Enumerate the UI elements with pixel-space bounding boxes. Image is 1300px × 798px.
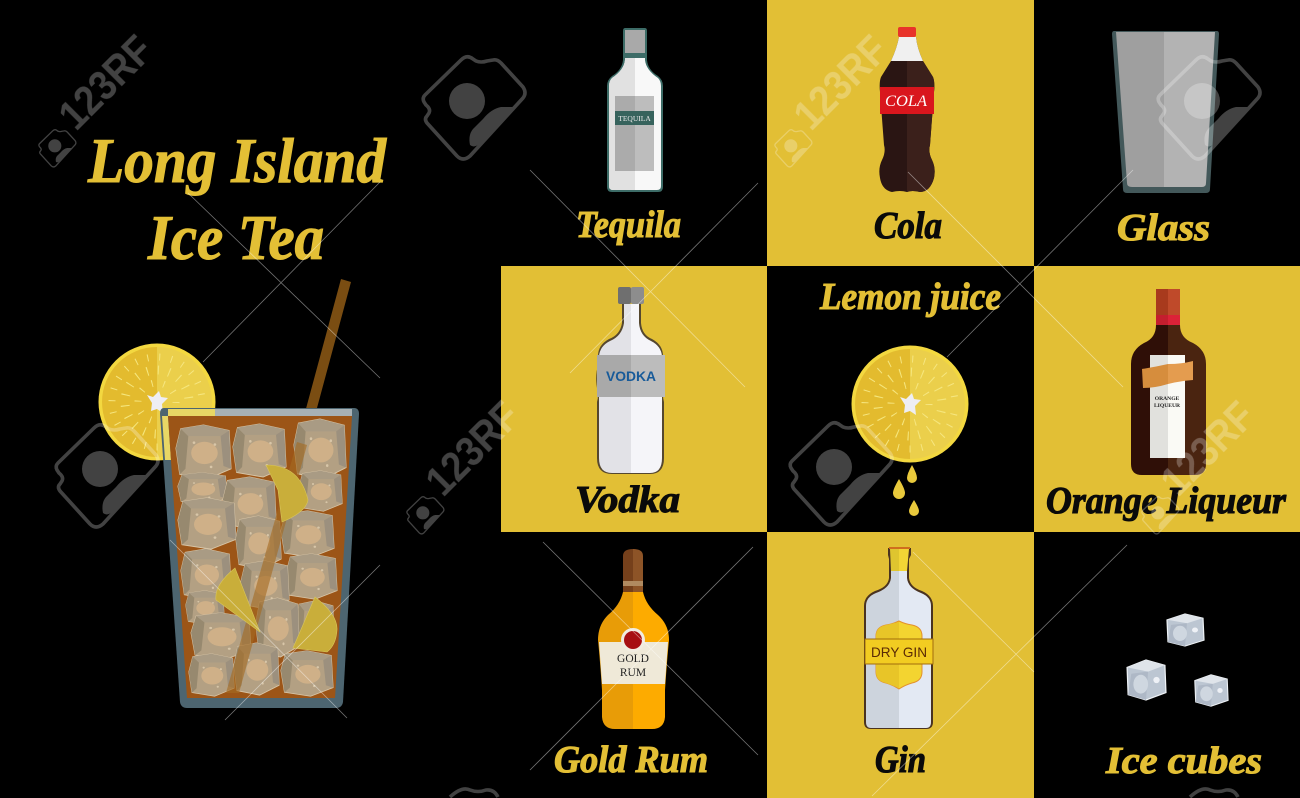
title: Long Island	[87, 125, 387, 196]
item: tequila	[576, 28, 681, 246]
icon: vodka bottle	[596, 287, 665, 474]
title	[87, 125, 387, 273]
icon: tequila bottle: TEQUILA	[618, 114, 651, 123]
icon: rum bottle	[598, 549, 669, 729]
label: Tequila	[576, 204, 681, 246]
label: Vodka	[575, 479, 680, 521]
label: Orange Liqueur	[1046, 480, 1287, 522]
label: Lemon juice	[819, 276, 1001, 318]
watermark: camera icons and 123RF text: 123RF	[1151, 392, 1264, 504]
item: vodka	[575, 287, 680, 521]
liquid	[168, 416, 352, 698]
glass rim	[168, 409, 352, 416]
icon: lemon slice	[852, 346, 968, 462]
item: gin	[864, 547, 933, 781]
icon: lemon garnish	[98, 344, 216, 460]
label: Gold Rum	[554, 739, 708, 781]
item: orange liqueur	[1046, 289, 1287, 522]
icon: rum bottle: GOLD	[617, 653, 649, 665]
icon: liqueur bottle: LIQUEUR	[1154, 403, 1181, 409]
item: cola	[874, 27, 942, 247]
label: Ice cubes	[1105, 740, 1262, 782]
label: Glass	[1117, 207, 1210, 249]
icon: juice drops	[893, 465, 919, 516]
item: lemon juice	[819, 276, 1001, 516]
glass body	[160, 408, 359, 708]
icon: liqueur bottle: ORANGE	[1155, 396, 1180, 402]
icon: cola bottle	[879, 27, 935, 192]
icon: rum bottle: RUM	[620, 667, 646, 679]
ice cubes	[176, 419, 346, 696]
icon: liqueur bottle	[1131, 289, 1206, 475]
watermark: thin diagonal lines	[170, 170, 1133, 796]
lemon wedges	[216, 465, 337, 652]
watermark: camera icons and 123RF text: 123RF	[49, 26, 162, 138]
cocktail illustration	[98, 279, 359, 708]
item: ice cubes	[1105, 614, 1262, 782]
label: Cola	[874, 205, 942, 247]
straw top	[297, 279, 351, 445]
icon: empty glass	[1112, 31, 1219, 193]
icon: gin bottle	[864, 547, 933, 729]
item: gold rum	[554, 549, 708, 781]
watermark: camera icons and 123RF text: 123RF	[416, 392, 529, 504]
icon: cola bottle: COLA	[885, 93, 927, 110]
title: Ice Tea	[147, 202, 324, 273]
straw inside glass	[226, 442, 307, 693]
icon: gin bottle: DRY GIN	[871, 644, 927, 660]
icon: vodka bottle: VODKA	[606, 368, 656, 384]
icon: ice cubes	[1127, 614, 1228, 706]
icon: tequila bottle	[607, 28, 663, 192]
item: glass	[1112, 31, 1219, 249]
panel: colour grid	[501, 0, 1300, 798]
watermark: camera icons and 123RF text: 123RF	[784, 26, 897, 138]
label: Gin	[875, 739, 926, 781]
lemon seen through rim and wall	[162, 409, 215, 460]
